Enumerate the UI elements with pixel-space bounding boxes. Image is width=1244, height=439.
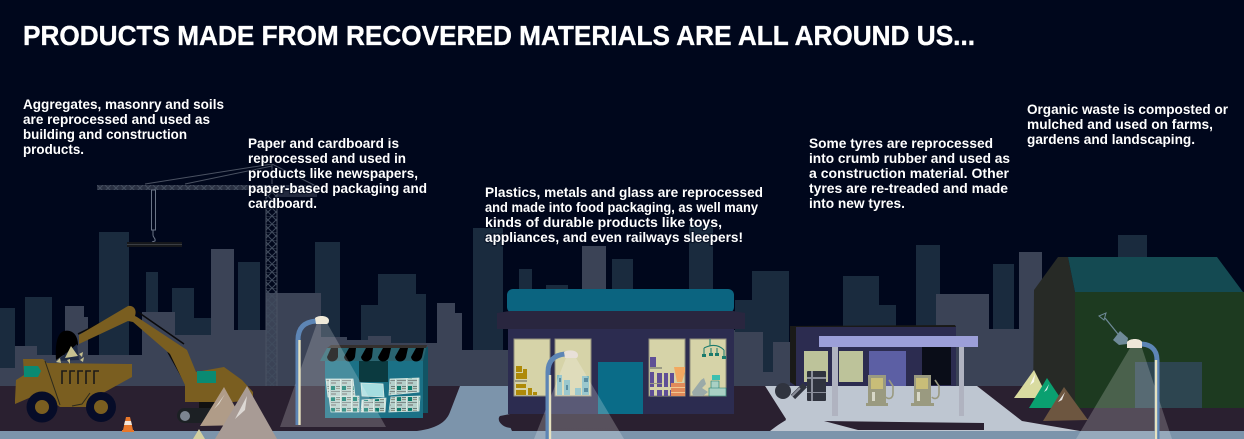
window: bottles and toys (649, 339, 685, 396)
front wheel (26, 392, 58, 422)
text: aggregates: products. (23, 141, 84, 157)
truck body (15, 359, 132, 407)
text: paper and cardboard: cardboard. (248, 195, 317, 211)
awning (320, 348, 426, 362)
station building (790, 326, 956, 386)
station dark door (922, 347, 951, 385)
barn (1033, 235, 1244, 408)
text: tyres: into crumb rubber and used as (809, 150, 1010, 166)
rear wheel (86, 392, 116, 422)
service station (775, 325, 978, 416)
text: paper and cardboard (248, 135, 427, 211)
text: tyres: Some tyres are reprocessed (809, 135, 993, 151)
text: organic waste: gardens and landscaping. (1027, 131, 1195, 147)
text: tyres: into new tyres. (809, 195, 905, 211)
text: plastics, metals and glass: appliances, and even railways sleepers! (485, 229, 743, 245)
text: plastics, metals and glass (485, 184, 763, 245)
hydraulic lines (78, 308, 188, 384)
text: paper and cardboard: Paper and cardboard is (248, 135, 399, 151)
text: tyres (809, 135, 1010, 211)
canopy columns (832, 347, 964, 416)
road strip (0, 431, 1244, 439)
text: organic waste: mulched and used on farms, (1027, 116, 1213, 132)
window: mobile and blocks (690, 339, 726, 396)
newsagent shop (320, 345, 428, 418)
truck window (24, 366, 41, 377)
shop sign (507, 289, 734, 313)
service station forecourt (765, 386, 1080, 431)
station dark side (790, 325, 956, 386)
text: tyres: tyres are re-treaded and made (809, 180, 1008, 196)
text: aggregates: building and construction (23, 126, 187, 142)
excavator (56, 306, 253, 423)
shop body (325, 361, 423, 418)
crane jib (97, 164, 317, 197)
shop side wall (423, 347, 428, 413)
window: food packaging (555, 339, 591, 396)
tyre stack (807, 371, 826, 401)
truck bed slats (62, 371, 99, 384)
loose tyres (775, 383, 805, 399)
text: plastics, metals and glass: and made into food packaging, as well many (485, 199, 758, 215)
excavator bucket with rocks (56, 331, 84, 364)
tower crane (97, 164, 317, 415)
back skyline (0, 225, 1014, 388)
shop interior (359, 361, 388, 382)
text: organic waste (1027, 101, 1229, 147)
barn door (1135, 362, 1202, 408)
barn side wall (1033, 257, 1075, 407)
text: paper and cardboard: products like newspapers, (248, 165, 418, 181)
street lamp centre (534, 350, 624, 439)
barn roof (1068, 257, 1243, 292)
station windows (804, 351, 863, 382)
text: aggregates: are reprocessed and used as (23, 111, 210, 127)
street lamp right (1076, 339, 1172, 439)
shovel (1099, 313, 1128, 345)
barn chimney (1118, 235, 1147, 257)
dump truck (15, 359, 132, 422)
fuel pump left (866, 375, 893, 406)
traffic cone (122, 417, 134, 432)
crane mast (266, 190, 277, 415)
shop door (598, 362, 643, 414)
barn front wall (1075, 292, 1244, 408)
ground (0, 386, 1244, 439)
shop wall (508, 329, 734, 414)
aggregate piles (193, 386, 277, 439)
text: paper and cardboard: paper-based packaging and (248, 180, 427, 196)
crane hook and load (127, 190, 182, 247)
text: plastics, metals and glass: kinds of durable products like toys, (485, 214, 722, 230)
text: plastics, metals and glass: Plastics, metals and glass are reprocessed (485, 184, 763, 200)
left pavement (0, 386, 1244, 439)
text: organic waste: Organic waste is composted or (1027, 101, 1229, 117)
text: tyres: a construction material. Other (809, 165, 1010, 181)
newspaper displays (326, 378, 420, 412)
station blue door (869, 351, 906, 386)
street lamp left (280, 316, 386, 427)
shop: plastics, metals and glass (497, 289, 745, 414)
shop roof band (497, 311, 745, 329)
fuel pump right (911, 375, 939, 406)
title: PRODUCTS MADE FROM RECOVERED MATERIALS ARE ALL AROUND US... (23, 20, 975, 51)
compost piles (1014, 370, 1088, 421)
excavator cab window (197, 371, 216, 383)
text: aggregates (23, 96, 224, 157)
front skyline (0, 246, 800, 386)
window: storage containers (514, 339, 550, 396)
text: aggregates: Aggregates, masonry and soils (23, 96, 224, 112)
plum ground under shop (499, 386, 786, 430)
text: paper and cardboard: reprocessed and used in (248, 150, 406, 166)
excavator tracks (177, 400, 233, 423)
shop roof (327, 345, 427, 348)
canopy roof (819, 336, 978, 347)
excavator arm and body (79, 306, 253, 402)
